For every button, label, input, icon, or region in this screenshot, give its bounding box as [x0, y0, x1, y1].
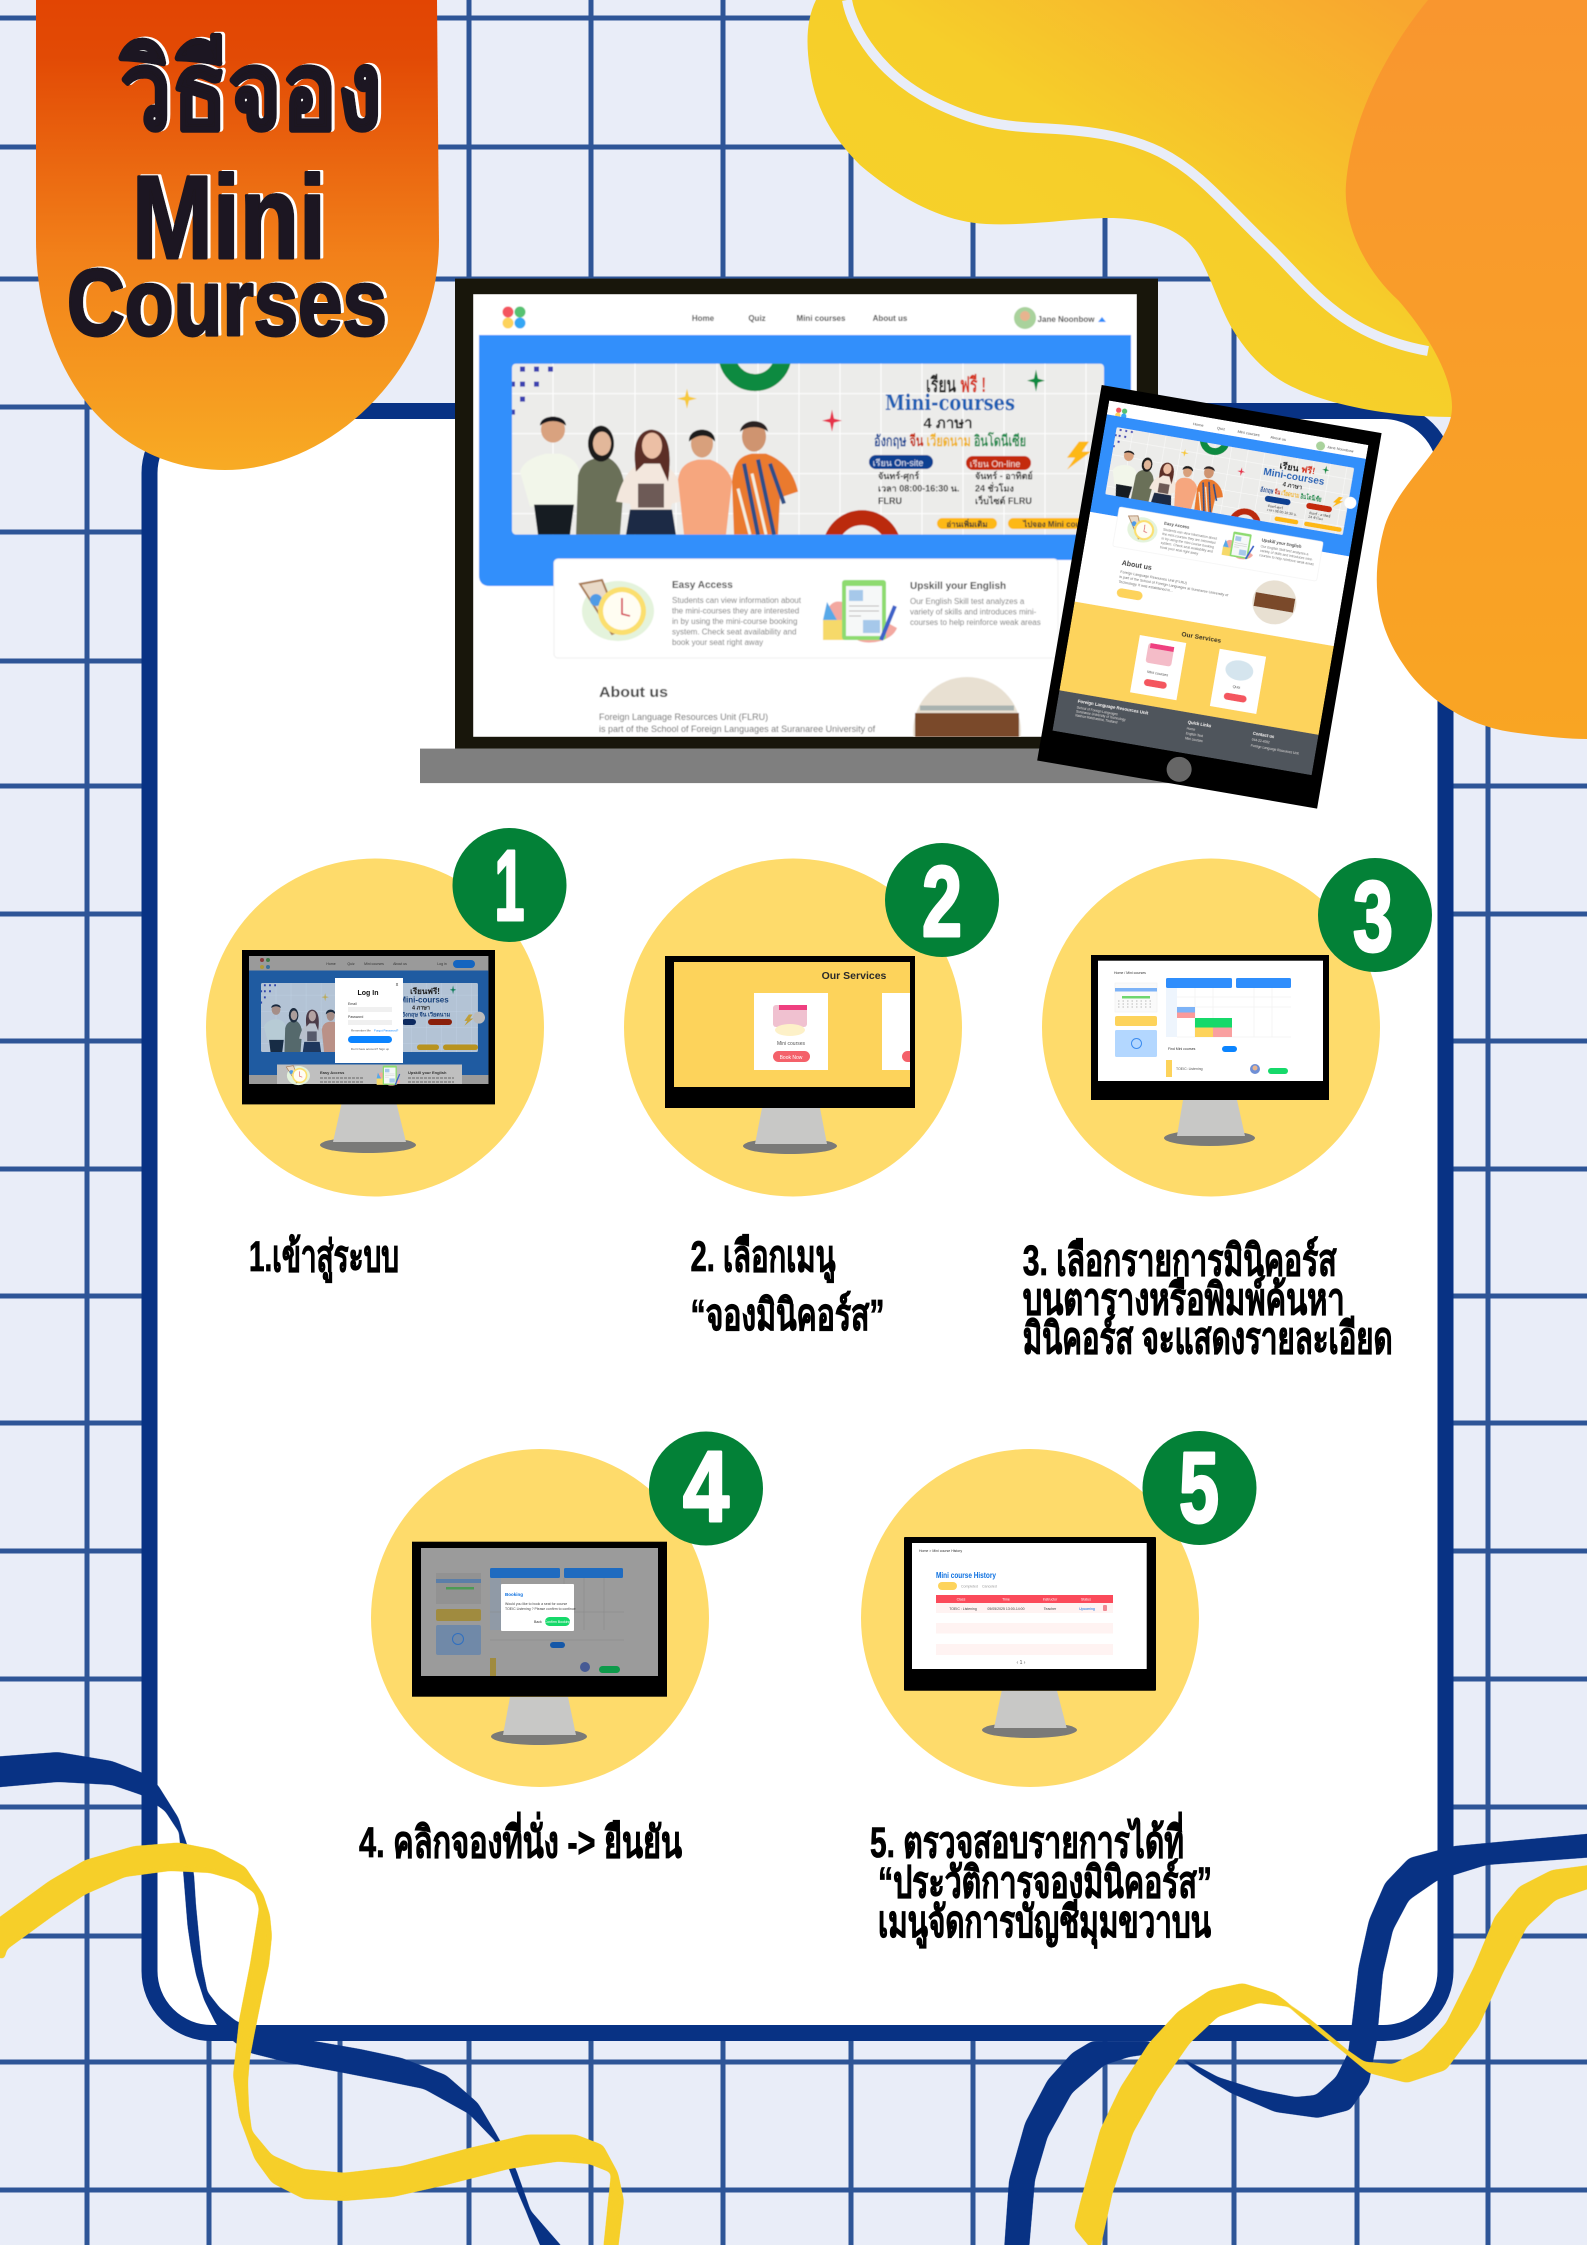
laptop screen: variety of skills and introduces mini-: [910, 608, 1037, 616]
step 3 label: 3. เลือกรายการมินิคอร์ส: [1023, 1236, 1337, 1285]
tablet screen: Foreign Language Resources Unit: [1250, 743, 1299, 756]
step 5 label: 5. ตรวจสอบรายการได้ที่: [870, 1812, 1184, 1867]
monitor 1: log in: Easy Access: [320, 1070, 345, 1075]
tablet screen: 4 ภาษา: [1282, 481, 1303, 491]
step 1 label: 1.เข้าสู่ระบบ: [249, 1233, 399, 1283]
step 2 label: “จองมินิคอร์ส”: [690, 1291, 884, 1340]
monitor 4: booking confirm: [412, 1542, 667, 1745]
laptop screen: เว็บไซต์ FLRU: [975, 494, 1032, 506]
tablet body: [1037, 385, 1382, 809]
login modal: [335, 978, 403, 1063]
monitor 5: history: Canceled: [982, 1584, 997, 1588]
laptop screen: courses to help reinforce weak areas: [910, 618, 1041, 627]
monitor 5: history: 05/05/2025 13:00-14:00: [987, 1607, 1025, 1611]
tablet screen: จันทร์-ศุกร์: [1267, 504, 1283, 511]
step 3 label: [1023, 1236, 1393, 1363]
monitor 2: our services: Our Services: [822, 970, 887, 982]
laptop screen: อังกฤษ จีน เวียดนาม อินโดนีเซีย: [874, 431, 1026, 450]
monitor 2: our services: Mini courses: [777, 1041, 806, 1047]
tablet screen: [1052, 400, 1368, 775]
step 1 circle: [206, 858, 544, 1196]
step 3 circle: [1042, 858, 1380, 1196]
tablet screen: Easy Access: [1164, 521, 1190, 530]
monitor 2: our services: [665, 956, 915, 1154]
step 5 label: เมนูจัดการบัญชีมุมขวาบน: [878, 1898, 1211, 1950]
monitor 1: log in: 4 ภาษา: [412, 1004, 430, 1012]
monitor 5: history: TOEIC : Listening: [949, 1607, 977, 1611]
tablet screen: Mini courses: [1237, 429, 1260, 437]
monitor 5: history: Time: [1002, 1598, 1010, 1602]
ribbon: yellow right: [1074, 1864, 1587, 2245]
tablet screen: Foreign Language Resources Unit (FLRU): [1120, 570, 1187, 585]
login modal: Email: [348, 1002, 357, 1006]
laptop screen: Easy Access: [672, 580, 733, 591]
blob: orange right: [1346, 0, 1587, 739]
login modal: Remember Me: [351, 1028, 371, 1032]
laptop screen: 24 ชั่วโมง: [975, 482, 1014, 494]
monitor 1: log in: Home: [326, 962, 336, 966]
laptop screen: เรียน ฟรี !: [926, 373, 986, 397]
laptop screen: เวลา 08:00-16:30 น.: [878, 484, 959, 494]
tablet screen: เรียน ฟรี!: [1279, 460, 1316, 476]
tablet screen: 044-22-4052: [1251, 738, 1270, 745]
laptop screen: About us: [599, 684, 668, 701]
badge 5: 5: [1179, 1432, 1219, 1544]
tablet screen: 24 ชั่วโมง: [1308, 514, 1324, 521]
tablet screen: Foreign Language Resources Unit: [1077, 699, 1149, 716]
ribbon: yellow left: [0, 1842, 624, 2245]
monitor 1: log in: Log in: [437, 962, 447, 966]
login modal: Don't have account? Sign up: [351, 1047, 389, 1051]
tablet screen: Mini courses: [1185, 736, 1203, 743]
step 3 label: มินิคอร์ส จะแสดงรายละเอียด: [1023, 1314, 1393, 1363]
badge 2: [885, 843, 999, 958]
laptop mockup: [420, 279, 1200, 785]
laptop screen: Quiz: [748, 314, 766, 323]
tablet screen: Mini-courses: [1263, 467, 1326, 488]
badge 4: 4: [683, 1431, 729, 1543]
title text: Courses: [67, 250, 387, 356]
tablet screen: Nakhon Ratchasima, Thailand: [1075, 713, 1118, 725]
monitor 5: history: Home > Mini course History: [919, 1549, 962, 1553]
monitor 5: history: Teacher: [1044, 1607, 1057, 1611]
monitor 1: log in: [242, 950, 495, 1153]
badge 2: 2: [922, 846, 962, 958]
booking modal: Booking: [505, 1592, 523, 1597]
monitor 3: schedule: Home / Mini courses: [1114, 971, 1146, 975]
title shield: [36, 0, 439, 470]
monitor 1: log in: About us: [393, 962, 407, 966]
step 3 label: บนตารางหรือพิมพ์ค้นหา: [1023, 1275, 1345, 1324]
ribbon: navy right: [1004, 1833, 1587, 2245]
laptop screen: เรียน On-line: [970, 459, 1020, 469]
laptop screen: book your seat right away: [672, 638, 763, 647]
monitor 5: history: Class: [957, 1598, 966, 1602]
monitor 1: log in: Mini-courses: [399, 996, 449, 1004]
tablet screen: Quick Links: [1187, 719, 1212, 729]
laptop screen: Mini-courses: [885, 390, 1015, 415]
tablet screen: Students can view information about: [1163, 528, 1217, 541]
laptop screen: Home: [692, 314, 715, 323]
tablet screen: เวลา 08:00-16:30 น.: [1267, 508, 1297, 517]
booking modal: [501, 1584, 576, 1631]
monitor 5: history: ‹ 1 ›: [1017, 1660, 1026, 1666]
monitor 5: history: Completed: [961, 1584, 978, 1588]
login modal: Password: [348, 1015, 363, 1019]
monitor 3: schedule: TOEIC: Listening: [1176, 1067, 1203, 1071]
monitor 5: history: Upcoming: [1079, 1607, 1095, 1611]
step 4 circle: [371, 1449, 709, 1787]
badge 3: [1318, 858, 1432, 973]
title text: วิธีจอง: [119, 30, 382, 153]
monitor 1: log in: อังกฤษ จีน เวียดนาม: [402, 1012, 451, 1018]
tablet screen: Upskill your English: [1261, 537, 1302, 549]
tablet screen: School of Foreign Languages: [1076, 705, 1119, 717]
tablet screen: Home: [1193, 421, 1205, 428]
monitor 3: schedule: [1091, 955, 1329, 1146]
tablet home button: [1165, 755, 1194, 784]
tablet screen: English Test: [1186, 731, 1203, 738]
tablet screen: Quiz: [1217, 425, 1226, 432]
tablet screen: Jane Noonbow: [1327, 444, 1354, 454]
panel: main white card: [150, 411, 1446, 2033]
booking modal: Would you like to book a seat for course: [505, 1602, 567, 1606]
monitor 5: history: [904, 1537, 1156, 1738]
monitor 5: history: Mini course History: [936, 1570, 996, 1580]
laptop screen: in by using the mini-course booking: [672, 617, 797, 626]
laptop screen: ไปจอง Mini courses: [1022, 519, 1097, 529]
tablet screen: variety of skills and introduces mini-: [1260, 549, 1313, 562]
laptop screen: FLRU: [878, 496, 902, 506]
booking modal: TOEIC Listening ? Please confirm to continue: [505, 1607, 576, 1611]
tablet screen: in by using the mini-course booking: [1161, 536, 1214, 549]
tablet screen: the mini-courses they are interested: [1162, 532, 1216, 545]
blob stripe: [847, 0, 1428, 351]
laptop screen: the mini-courses they are interested: [672, 606, 799, 616]
monitor 1: log in: Mini courses: [364, 962, 384, 966]
monitor 3: schedule: Find Mini courses: [1168, 1047, 1196, 1051]
step 2 label: [690, 1233, 884, 1340]
blob: yellow top right: [808, 0, 1587, 417]
login modal: Log In: [358, 990, 378, 997]
monitor 5: history: Status: [1081, 1598, 1091, 1602]
laptop screen: Foreign Language Resources Unit (FLRU): [599, 712, 768, 722]
laptop screen: Jane Noonbow: [1038, 315, 1095, 324]
booking modal: Back: [534, 1620, 542, 1624]
monitor 1: log in: Quiz: [347, 962, 355, 966]
laptop screen: อ่านเพิ่มเติม: [946, 518, 988, 529]
laptop screen: 4 ภาษา: [923, 415, 973, 432]
badge 1: 1: [494, 830, 524, 942]
laptop base: [420, 749, 1200, 783]
badge 4: [649, 1431, 763, 1546]
monitor 1: log in: Upskill your English: [408, 1070, 447, 1075]
tablet screen: system. Check seat availability and: [1160, 541, 1213, 554]
tablet screen: Our Services: [1181, 631, 1222, 645]
laptop screen: [473, 294, 1137, 785]
badge 3: 3: [1353, 861, 1393, 973]
tablet screen: book your seat right away: [1160, 545, 1199, 556]
step 2 label: 2. เลือกเมนู: [690, 1233, 836, 1283]
monitor 2: our services: Book Now: [780, 1055, 803, 1061]
laptop frame: [455, 279, 1158, 749]
tablet screen: About us: [1270, 434, 1286, 442]
step 5 label: “ประวัติการจองมินิคอร์ส”: [878, 1858, 1212, 1907]
monitor 5: history: Instructor: [1043, 1598, 1058, 1602]
ribbon: navy left: [0, 1752, 565, 2245]
tablet screen: Mini courses: [1147, 670, 1169, 677]
login modal: Forgot Password?: [374, 1028, 399, 1032]
login modal: x: [396, 982, 399, 988]
tablet screen: Technology. It was established in...: [1118, 580, 1173, 593]
tablet screen: is part of the School of Foreign Languages at Suranaree University of: [1119, 575, 1229, 597]
step 5 label: [870, 1812, 1212, 1950]
laptop screen: จันทร์ - อาทิตย์: [975, 470, 1033, 481]
tablet screen: Our English Skill test analyzes a: [1260, 544, 1309, 556]
tablet screen: จันทร์ - อาทิตย์: [1309, 511, 1331, 519]
tablet screen: Quiz: [1232, 685, 1241, 690]
tablet screen: Contact us: [1253, 731, 1275, 739]
tablet mockup: [1037, 385, 1382, 809]
step 4 label: 4. คลิกจองที่นั่ง -> ยืนยัน: [359, 1812, 682, 1867]
step 5 circle: [861, 1449, 1199, 1787]
tablet screen: About us: [1121, 560, 1152, 572]
tablet screen: courses to help reinforce weak areas: [1259, 553, 1314, 567]
booking modal: Confirm Booking: [545, 1620, 570, 1624]
laptop screen: Students can view information about: [672, 596, 802, 605]
tablet screen: Home: [1186, 726, 1196, 732]
laptop screen: Our English Skill test analyzes a: [910, 597, 1025, 606]
badge 1: [452, 828, 566, 942]
laptop screen: Mini courses: [797, 314, 846, 323]
monitor 1: log in: เรียนฟรี!: [410, 986, 440, 996]
laptop screen: About us: [873, 314, 908, 323]
laptop screen: system. Check seat availability and: [672, 628, 796, 636]
laptop screen: is part of the School of Foreign Languages at Suranaree University of: [599, 724, 876, 734]
tablet screen: อังกฤษ จีน เวียดนาม อินโดนีเซีย: [1260, 484, 1322, 504]
laptop screen: เรียน On-site: [873, 458, 923, 468]
title text: [67, 30, 387, 356]
step 2 circle: [624, 858, 962, 1196]
title text: Mini: [132, 152, 326, 284]
tablet screen: Suranaree University of Technology: [1076, 709, 1126, 722]
laptop screen: Upskill your English: [910, 581, 1006, 592]
badge 5: [1142, 1431, 1256, 1545]
laptop screen: จันทร์-ศุกร์: [878, 470, 919, 482]
